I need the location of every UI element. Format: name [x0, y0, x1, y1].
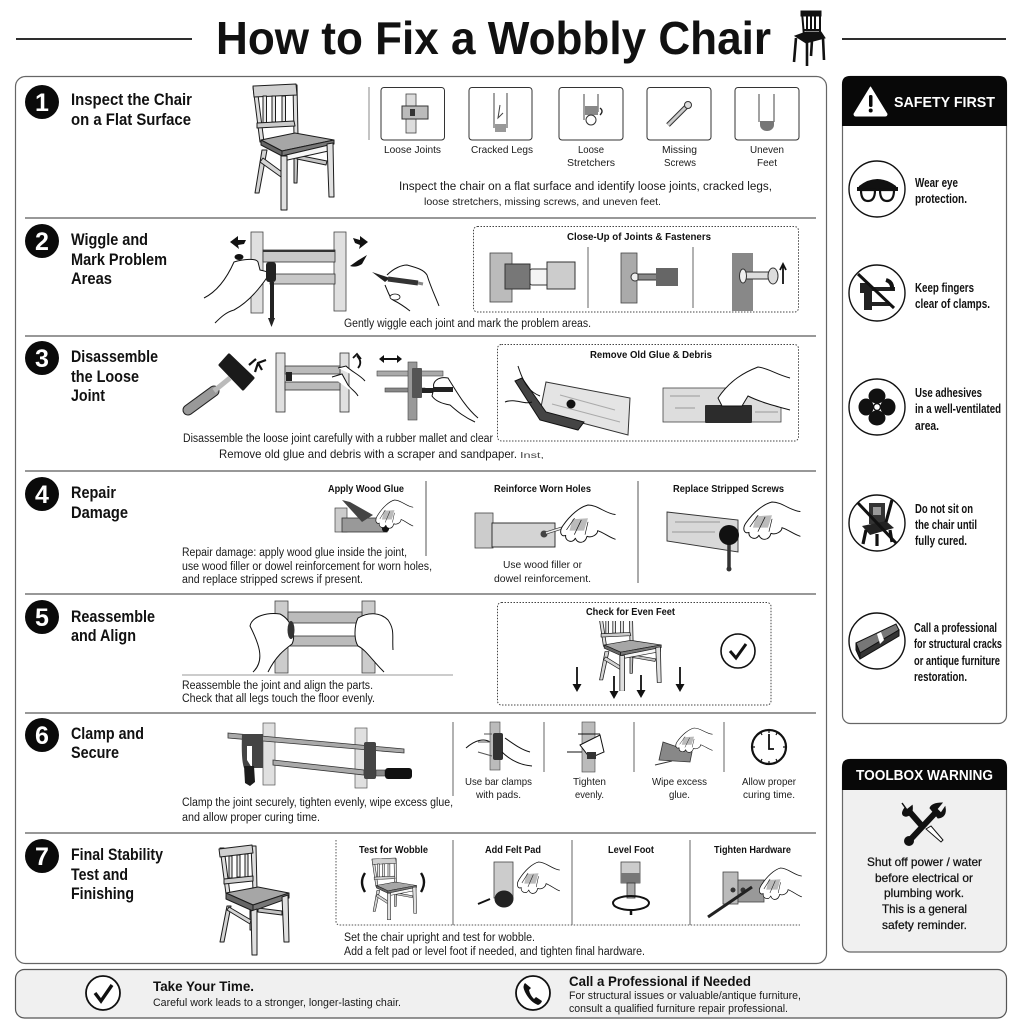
illustration: pulling clamp apart: [377, 355, 478, 422]
panel: final checks: [336, 840, 802, 925]
arrows: feet down: [572, 667, 684, 699]
description 4: use wood filler or dowel reinforcement for worn holes,: [182, 561, 432, 573]
description 4: and replace stripped screws if present.: [182, 574, 363, 586]
safety item: fingers clear of clamps: clear of clamps.: [915, 297, 990, 311]
heading 2: Mark Problem: [71, 251, 167, 269]
number 1: 1: [35, 89, 49, 117]
issue labels: Loose Joints: [384, 144, 441, 156]
illustration: chair: [599, 621, 662, 691]
safety item: ventilated area: in a well-ventilated: [915, 402, 1001, 416]
issue labels: Cracked Legs: [471, 144, 533, 156]
check: add felt pad: [478, 844, 560, 908]
description 7: Set the chair upright and test for wobble.: [344, 932, 535, 944]
safety item: do not sit: the chair until: [915, 518, 977, 532]
heading 3: Joint: [71, 387, 105, 405]
number 2: 2: [35, 228, 49, 256]
number 4: [25, 477, 59, 511]
heading 2: Wiggle and: [71, 231, 148, 249]
take your time text: Careful work leads to a stronger, longer-lasting chair.: [153, 997, 401, 1009]
check: test for wobble: Test for Wobble: [359, 844, 428, 856]
toolbox header: TOOLBOX WARNING: [856, 768, 993, 784]
safety item: do not sit: Do not sit on: [915, 502, 973, 516]
description 1: [399, 181, 772, 208]
description 5: [182, 680, 375, 705]
call a professional text: Call a Professional if Needed: [569, 973, 751, 989]
description 6: and allow proper curing time.: [182, 812, 320, 824]
number 1: [25, 85, 59, 119]
box title: Check for Even Feet: [586, 606, 675, 618]
sub-step: wipe glue: [652, 728, 712, 801]
safety item: call a professional: restoration.: [914, 670, 967, 684]
safety item: fingers clear of clamps: [849, 265, 990, 321]
issue labels: Missing: [662, 144, 697, 156]
step 4: [25, 477, 800, 586]
illustration: bar clamps on chair: [228, 723, 412, 788]
panel: close-up of joints and fasteners: [474, 226, 798, 312]
heading 4: Repair: [71, 484, 117, 502]
description 5: Check that all legs touch the floor evenly.: [182, 693, 375, 705]
illustration: finished chair: [219, 845, 289, 955]
column: reinforce worn holes: [475, 483, 615, 585]
number 3: 3: [35, 345, 49, 373]
safety header: SAFETY FIRST: [894, 95, 995, 111]
step 7: [25, 839, 802, 958]
safety item: do not sit: [849, 495, 977, 551]
toolbox text: plumbing work.: [884, 886, 964, 900]
heading 2: Areas: [71, 270, 112, 288]
sub-step: bar clamps: Use bar clamps: [465, 776, 532, 788]
description 4: [182, 547, 432, 586]
description 4: Repair damage: apply wood glue inside the joint,: [182, 547, 407, 559]
title header: [16, 11, 1006, 66]
icon: phone: [516, 976, 550, 1010]
description 3: Inst,: [520, 451, 544, 460]
heading 7: [71, 846, 164, 903]
safety item: fingers clear of clamps: Keep fingers: [915, 281, 974, 295]
toolbox text: safety reminder.: [882, 918, 967, 932]
heading 6: [71, 725, 144, 762]
number 6: 6: [35, 722, 49, 750]
number 5: 5: [35, 604, 49, 632]
illustration: chair: [253, 84, 334, 210]
safety item: ventilated area: area.: [915, 419, 939, 433]
take your time text: Take Your Time.: [153, 978, 254, 994]
step 2: [25, 224, 798, 330]
number 6: [25, 718, 59, 752]
call a professional text: For structural issues or valuable/antique furniture,: [569, 990, 801, 1002]
sub-step: tighten: Tighten: [573, 776, 606, 788]
sub-step: wipe glue: glue.: [669, 789, 690, 801]
column: reinforce worn holes: Reinforce Worn Holes: [494, 483, 591, 495]
heading 1: Inspect the Chair: [71, 91, 193, 109]
issue labels: Loose: [578, 144, 604, 156]
toolbox text: [867, 855, 982, 932]
issue labels: Feet: [757, 157, 777, 169]
icon box: cracked legs: [469, 88, 532, 140]
description 7: [344, 932, 645, 958]
icon box: missing screws: [647, 88, 711, 140]
close-up title: Close-Up of Joints & Fasteners: [567, 231, 711, 243]
issue labels: Stretchers: [567, 157, 615, 169]
step 6: [25, 718, 796, 824]
check: level foot: Level Foot: [608, 844, 654, 856]
icon: title chair: [794, 11, 825, 66]
description 5: Reassemble the joint and align the parts.: [182, 680, 373, 692]
description 6: [182, 797, 453, 824]
call a professional text: [569, 973, 801, 1015]
toolbox header: [842, 759, 1007, 790]
illustration: marking hand: [372, 265, 439, 311]
heading 3: Disassemble: [71, 348, 158, 366]
step 5: [25, 600, 771, 705]
sub-step: tighten: evenly.: [575, 789, 604, 801]
heading 5: and Align: [71, 627, 136, 645]
illustration: scraper on plank: [505, 366, 630, 435]
sub-step: curing clock: curing time.: [743, 789, 795, 801]
heading 6: Secure: [71, 744, 119, 762]
close-up: bolt joint: [732, 253, 786, 311]
take your time text: [153, 978, 401, 1009]
close-up: screw joint: [621, 253, 678, 303]
icon: crossed wrench and screwdriver: [902, 803, 945, 846]
safety item: eye protection: Wear eye: [915, 176, 958, 190]
panel: check for even feet: [498, 602, 771, 705]
icon box: loose joints: [381, 88, 444, 140]
panel: toolbox warning: [842, 759, 1007, 952]
call a professional text: consult a qualified furniture repair professional.: [569, 1003, 788, 1015]
sub-step: tighten: [567, 722, 606, 801]
safety item: call a professional: Call a professional: [914, 621, 997, 635]
safety item: call a professional: [849, 613, 1002, 684]
icon box: loose stretchers: [559, 88, 623, 140]
check: tighten hardware: Tighten Hardware: [714, 844, 791, 856]
check: add felt pad: Add Felt Pad: [485, 844, 541, 856]
safety item: ventilated area: Use adhesives: [915, 386, 982, 400]
icon box: uneven feet: [735, 88, 799, 140]
illustration: sanding plank: [663, 367, 790, 423]
heading 3: [71, 348, 158, 405]
heading 5: [71, 608, 155, 645]
check: level foot: [608, 844, 654, 915]
icon: check mark: [721, 634, 755, 668]
sub-step: bar clamps: [465, 722, 532, 801]
description 1: Inspect the chair on a flat surface and identify loose joints, cracked legs,: [399, 181, 772, 193]
column: replace stripped screws: [667, 483, 800, 572]
column: replace stripped screws: Replace Stripped Screws: [673, 483, 784, 495]
description 3: [183, 433, 544, 461]
description 3: Remove old glue and debris with a scraper and sandpaper.: [219, 447, 517, 461]
heading 7: Finishing: [71, 885, 134, 903]
sub-step: curing clock: Allow proper: [742, 776, 796, 788]
number 3: [25, 341, 59, 375]
number 7: 7: [35, 843, 49, 871]
safety item: ventilated area: [849, 379, 1001, 435]
issue labels: [384, 144, 784, 169]
column: reinforce worn holes: dowel reinforcement.: [494, 573, 591, 585]
heading 3: the Loose: [71, 368, 139, 386]
illustration: glue bottle: [335, 500, 413, 532]
title: How to Fix a Wobbly Chair: [216, 12, 771, 64]
number 2: [25, 224, 59, 258]
safety header: [842, 76, 1007, 126]
illustration: loose joint frame: [276, 353, 365, 412]
toolbox text: This is a general: [882, 902, 967, 916]
illustration: aligning hands: [250, 601, 393, 673]
panel: safety first: [842, 76, 1007, 724]
illustration: rubber mallet: [188, 355, 266, 410]
close-up: tenon joint: [490, 253, 575, 302]
heading 6: Clamp and: [71, 725, 144, 743]
step 1: [25, 84, 799, 210]
safety item: do not sit: fully cured.: [915, 534, 967, 548]
illustration: screw: [667, 502, 800, 572]
description 3: Disassemble the loose joint carefully with a rubber mallet and clear: [183, 433, 493, 445]
panel: main steps: [16, 76, 826, 964]
heading 1: [71, 91, 193, 129]
description 1: loose stretchers, missing screws, and uneven feet.: [424, 196, 661, 208]
column: apply wood glue: Apply Wood Glue: [328, 483, 404, 495]
illustration: dowel reinforcement: [475, 505, 615, 548]
check: test for wobble: [359, 844, 428, 920]
description 6: Clamp the joint securely, tighten evenly, wipe excess glue,: [182, 797, 453, 809]
column: apply wood glue: [328, 483, 413, 532]
safety item: eye protection: protection.: [915, 192, 967, 206]
box title: Remove Old Glue & Debris: [590, 349, 712, 361]
issue labels: Uneven: [750, 144, 784, 156]
icon: check: [86, 976, 120, 1010]
toolbox text: before electrical or: [875, 871, 973, 885]
issue labels: Screws: [664, 157, 696, 169]
heading 7: Test and: [71, 866, 128, 884]
heading 7: Final Stability: [71, 846, 164, 864]
caption 2: Gently wiggle each joint and mark the problem areas.: [344, 318, 591, 330]
panel: remove old glue and debris: [498, 344, 798, 441]
panel: footer: [16, 970, 1006, 1018]
safety item: eye protection: [849, 161, 967, 217]
number 5: [25, 600, 59, 634]
heading 2: [71, 231, 167, 288]
heading 4: [71, 484, 128, 522]
number 4: 4: [35, 481, 49, 509]
heading 5: Reassemble: [71, 608, 155, 626]
check: tighten hardware: [708, 844, 802, 917]
sub-step: bar clamps: with pads.: [475, 789, 521, 801]
heading 1: on a Flat Surface: [71, 111, 191, 129]
illustration: wiggle joint: [204, 232, 368, 327]
number 7: [25, 839, 59, 873]
heading 4: Damage: [71, 504, 128, 522]
toolbox text: Shut off power / water: [867, 855, 982, 869]
sub-step: wipe glue: Wipe excess: [652, 776, 707, 788]
step 3: [25, 341, 798, 461]
description 7: Add a felt pad or level foot if needed, and tighten final hardware.: [344, 946, 645, 958]
column: reinforce worn holes: Use wood filler or: [503, 559, 582, 571]
sub-step: curing clock: [742, 730, 796, 801]
